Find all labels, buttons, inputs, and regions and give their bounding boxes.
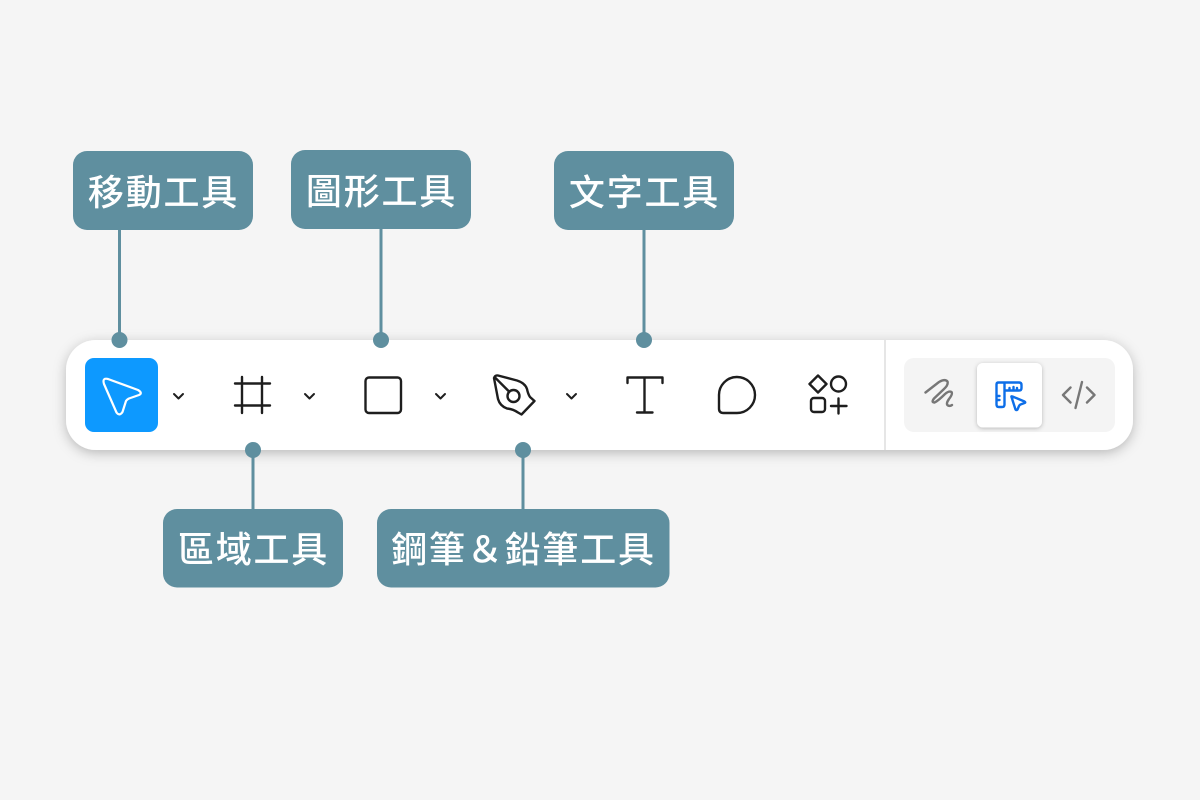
callout: 區域工具 — [163, 442, 343, 588]
callout: 區域工具: 區域工具 — [178, 529, 329, 570]
icon: pen tool — [494, 375, 534, 414]
callout: 圖形工具 — [291, 150, 471, 348]
icon: comment tool — [719, 377, 755, 413]
icon: chevron shape — [436, 394, 445, 398]
icon: shapes and actions — [810, 376, 846, 414]
icon: chevron frame — [305, 394, 314, 398]
callout: 鋼筆＆鉛筆工具: 鋼筆＆鉛筆工具 — [391, 529, 656, 570]
callout: 圖形工具: 圖形工具 — [306, 171, 457, 212]
icon: move tool (active) — [85, 358, 158, 432]
icon: chevron pen — [567, 394, 576, 398]
icon: draw mode — [926, 380, 952, 406]
icon: design mode — [996, 382, 1025, 410]
mode switcher — [904, 358, 1115, 432]
callout: 文字工具: 文字工具 — [569, 172, 720, 213]
icon: frame tool — [235, 377, 270, 413]
toolbar panel — [66, 340, 1133, 450]
icon: code mode — [1063, 382, 1094, 408]
callout: 文字工具 — [554, 151, 734, 348]
icon: text tool — [628, 378, 662, 412]
callout: 移動工具: 移動工具 — [88, 172, 239, 213]
callout: 鋼筆＆鉛筆工具 — [377, 442, 670, 588]
active design mode tile — [977, 363, 1042, 428]
icon: chevron move — [174, 394, 183, 398]
icon: shape tool — [366, 378, 401, 413]
callout: 移動工具 — [73, 151, 253, 348]
